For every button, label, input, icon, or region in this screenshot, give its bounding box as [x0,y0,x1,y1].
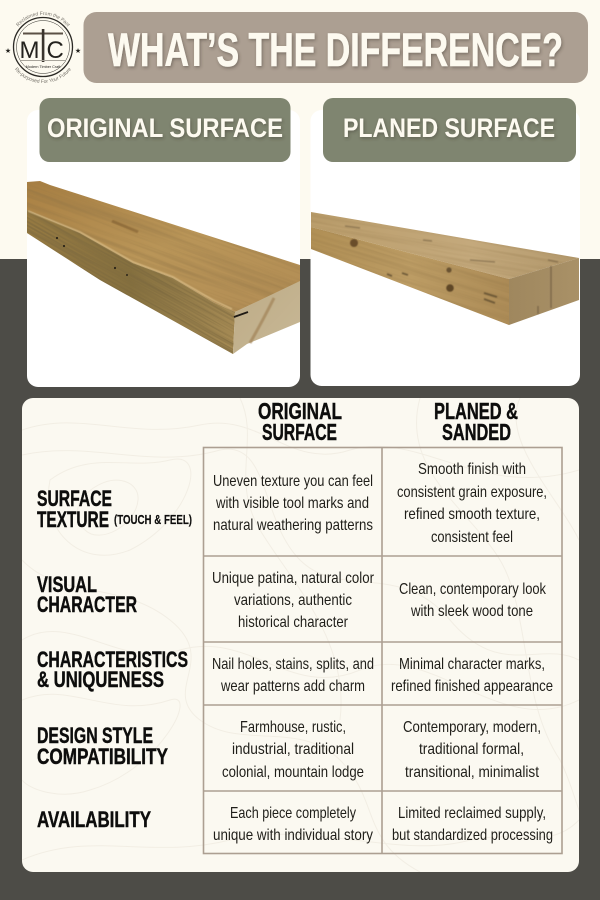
cell: original availability [213,805,373,844]
logo: Modern Timber Craft: ★ [75,47,81,55]
cell: original surface texture [213,473,373,534]
title banner [84,12,588,83]
column heading: original surface: SURFACE [262,419,337,445]
label: planed surface: PLANED SURFACE [343,113,555,143]
cell: original design style: industrial, traditional [232,741,354,758]
row label: design style compatibility: DESIGN STYLE [37,723,153,748]
cell: planed visual character: Clean, contemporary look [399,581,547,598]
cell: planed surface texture [397,461,547,546]
photo: rough wood beam [27,181,300,354]
row label: visual character: VISUAL [37,572,97,597]
cell: original characteristics: Nail holes, stains, splits, and [212,656,374,673]
cell: planed surface texture: consistent grain exposure, [397,484,547,501]
cell: planed surface texture: Smooth finish with [418,461,526,478]
logo: Modern Timber Craft: M [20,37,40,64]
column heading: planed and sanded: SANDED [442,419,511,445]
cell: planed characteristics [391,656,553,695]
cell: original design style: colonial, mountain lodge [222,764,364,781]
logo: Modern Timber Craft: Reclaimed From the Past [16,12,70,27]
row label: design style compatibility [37,723,168,769]
label: original surface: ORIGINAL SURFACE [47,113,283,143]
row label: availability: AVAILABILITY [37,807,151,832]
table grid [204,448,562,854]
cell: planed availability: Limited reclaimed supply, [398,805,546,822]
row label: characteristics and uniqueness: & UNIQUENESS [37,667,164,692]
row label: surface texture: (TOUCH & FEEL) [114,513,192,527]
logo: Modern Timber Craft: Re-purposed For Your Future [15,67,71,83]
column heading: original surface [258,398,342,445]
row label: visual character [37,572,137,617]
column heading: planed and sanded: PLANED & [434,398,518,424]
cell: planed availability: but standardized processing [392,827,553,844]
cell: original visual character: variations, authentic [234,592,352,609]
cell: original characteristics: wear patterns add charm [220,678,365,695]
row label: characteristics and uniqueness [37,647,188,692]
cell: planed design style: Contemporary, modern, [403,719,541,736]
row label: characteristics and uniqueness: CHARACTERISTICS [37,647,188,672]
cell: original visual character: Unique patina, natural color [212,570,375,587]
row label: surface texture: TEXTURE [37,507,109,532]
cell: planed characteristics: refined finished appearance [391,678,553,695]
cell: planed visual character [399,581,547,620]
panel: original surface photo [27,110,300,387]
cell: planed design style [403,719,541,781]
cell: original characteristics [212,656,374,695]
cell: original surface texture: natural weathering patterns [213,517,373,534]
cell: planed surface texture: refined smooth texture, [404,506,540,523]
cell: planed characteristics: Minimal character marks, [399,656,545,673]
cell: original surface texture: with visible tool marks and [215,495,369,512]
logo: Modern Timber Craft: Modern Timber Craft [26,65,61,69]
label: planed surface [323,98,576,162]
panel: planed surface photo [310,110,580,386]
row label: surface texture [37,486,192,532]
cell: original visual character: historical character [238,614,349,631]
cell: original surface texture: Uneven texture you can feel [213,473,373,490]
cell: planed design style: traditional formal, [419,741,524,758]
cell: original availability: unique with individual story [213,827,373,844]
row label: surface texture: SURFACE [37,486,112,511]
cell: original design style [222,719,364,781]
logo: Modern Timber Craft: C [46,37,64,64]
column heading: planed and sanded [434,398,518,445]
cell: planed surface texture: consistent feel [431,529,513,546]
logo: Modern Timber Craft [5,12,81,83]
label: original surface [40,98,290,162]
panel: comparison table [22,398,579,872]
photo: planed wood beam [311,212,579,325]
cell: original design style: Farmhouse, rustic, [240,719,346,736]
row label: visual character: CHARACTER [37,592,137,617]
cell: original availability: Each piece completely [230,805,356,822]
cell: planed visual character: with sleek wood tone [410,603,533,620]
row label: design style compatibility: COMPATIBILITY [37,744,168,769]
cell: planed design style: transitional, minimalist [405,764,539,781]
logo: Modern Timber Craft: ★ [5,47,11,55]
cell: original visual character [212,570,375,631]
cell: planed availability [392,805,553,844]
column heading: original surface: ORIGINAL [258,398,342,424]
